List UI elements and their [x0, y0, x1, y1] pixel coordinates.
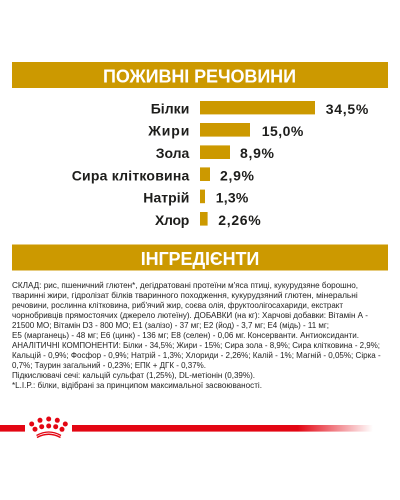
text block: ingredients and analytical components: 0,7%; Таурин загальний - 0,23%; ЕПК + ДГК - 0,37%. [12, 360, 206, 370]
row: protein: Білки [151, 100, 189, 116]
row: crude fibre: Сира клітковина [72, 168, 190, 184]
text block: ingredients and analytical components: Підкислювачі сечі: кальцій сульфат (1,25%), DL-метіонін (0,39%). [12, 370, 255, 380]
row: sodium [143, 190, 249, 206]
text block: ingredients and analytical components: чорнобривців прямостоячих (джерело лютеїну). ДОБАВКИ (на кг): Харчові добавки: Вітамін А - [12, 310, 368, 320]
panel: ingredients header [12, 244, 388, 270]
text block: ingredients and analytical components: СКЛАД: рис, пшеничний глютен*, дегідратовані протеїни м'яса птиці, кукурудзяне борошно, [12, 280, 358, 290]
panel: nutrients header [12, 62, 388, 88]
panel: ingredients header: ІНГРЕДІЄНТИ [141, 249, 259, 269]
text block: ingredients and analytical components: Е5 (марганець) - 48 мг; Е6 (цинк) - 136 мг; Е8 (селен) - 0,06 мг. Консерванти. Антиоксиданти. [12, 330, 359, 340]
row: sodium: Натрій [143, 190, 189, 206]
row: chlorine: Хлор [155, 212, 189, 228]
panel: nutrients header: ПОЖИВНІ РЕЧОВИНИ [103, 66, 296, 86]
row: ash: 8,9% [240, 145, 275, 161]
row: ash [156, 145, 275, 161]
row: sodium: 1,3% [216, 190, 249, 206]
footer band: red line left [0, 425, 25, 432]
row: protein [151, 100, 369, 117]
text block: ingredients and analytical components: *L.I.P.: білки, відібрані за принципом максимальної засвоюваності. [12, 380, 262, 390]
row: protein: 34,5% [326, 101, 369, 117]
text block: ingredients and analytical components: речовини, рослинна клітковина, риб'ячий жир, соєва олія, фруктоолігосахариди, екстракт [12, 300, 343, 310]
bar chart: nutrients [72, 100, 369, 228]
row: fat: 15,0% [262, 123, 304, 139]
footer band: red line right with fade [72, 425, 373, 432]
row: crude fibre [72, 167, 255, 184]
text block: ingredients and analytical components [12, 280, 381, 390]
text block: ingredients and analytical components: тваринні жири, гідролізат білків тваринного походження, кукурудзяний глютен, мінеральні [12, 290, 358, 300]
row: chlorine [155, 212, 261, 228]
row: chlorine: 2,26% [218, 212, 261, 228]
icon: Royal Canin crown [29, 416, 68, 438]
row: ash: Зола [156, 145, 190, 161]
text block: ingredients and analytical components: Кальцій - 0,9%; Фосфор - 0,9%; Натрій - 1,3%; Хлориди - 2,26%; Калій - 1%; Магній - 0,05%; Сірка - [12, 350, 381, 360]
row: fat [147, 123, 304, 139]
row: crude fibre: 2,9% [220, 168, 255, 184]
text block: ingredients and analytical components: 21500 МО; Вітамін D3 - 800 МО; Е1 (залізо) - 37 мг; Е2 (йод) - 3,7 мг; Е4 (мідь) - 11 мг; [12, 320, 329, 330]
row: fat: Жири [147, 123, 189, 139]
